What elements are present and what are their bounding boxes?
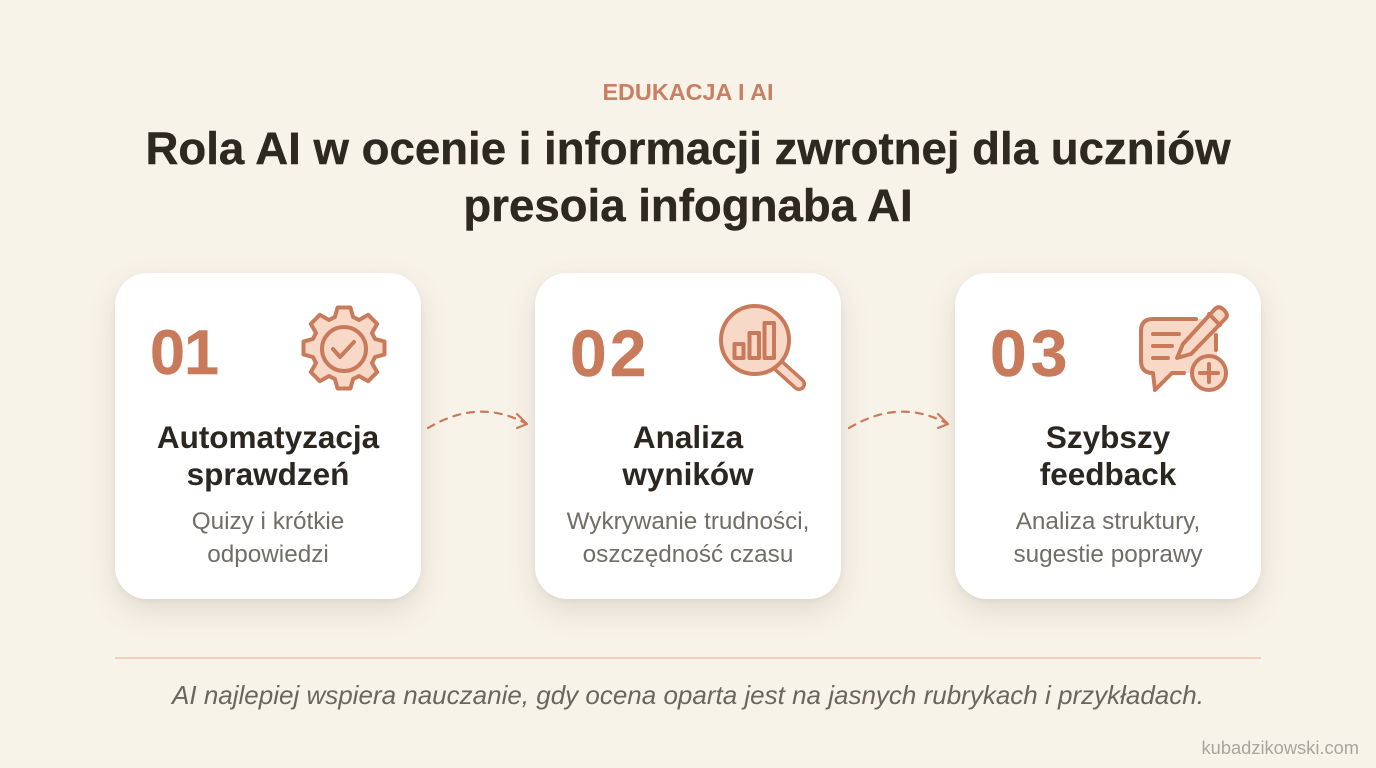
description: quizy: odpowiedzi bbox=[207, 541, 329, 568]
description: wykrywanie: Wykrywanie trudności, bbox=[567, 508, 809, 535]
heading: Analiza wyników bbox=[622, 419, 754, 492]
icon: magnifier with bars bbox=[721, 306, 799, 384]
description: analiza struktury bbox=[1013, 508, 1203, 568]
title bbox=[145, 123, 1231, 231]
icon: speech bubble with pencil and plus bbox=[1141, 307, 1227, 390]
heading: Automatyzacja sprawdzeń: sprawdzeń bbox=[187, 456, 349, 492]
eyebrow label: EDUKACJA I AI bbox=[602, 79, 774, 105]
footer note: AI najlepiej wspiera nauczanie, gdy ocena oparta jest na jasnych rubrykach i przykładach. bbox=[172, 680, 1204, 710]
heading: Szybszy feedback: Szybszy bbox=[1046, 419, 1170, 455]
panel: card 02 bbox=[535, 273, 841, 599]
heading: Analiza wyników: wyników bbox=[622, 456, 754, 492]
title: presoia infognaba AI bbox=[463, 180, 913, 231]
heading: Automatyzacja sprawdzeń bbox=[157, 419, 380, 492]
number 02: 02 bbox=[570, 316, 649, 390]
icon: gear with check bbox=[304, 308, 384, 388]
description: analiza struktury: sugestie poprawy bbox=[1013, 541, 1203, 568]
divider bbox=[115, 657, 1261, 659]
description: wykrywanie: oszczędność czasu bbox=[583, 541, 793, 568]
description: analiza struktury: Analiza struktury, bbox=[1016, 508, 1200, 535]
arrow: card 2 to card 3 bbox=[849, 412, 948, 428]
description: wykrywanie bbox=[566, 508, 809, 568]
arrow: card 1 to card 2 bbox=[428, 412, 527, 428]
heading: Szybszy feedback bbox=[1040, 419, 1176, 492]
heading: Szybszy feedback: feedback bbox=[1040, 456, 1176, 492]
watermark: kubadzikowski.com bbox=[1202, 737, 1359, 758]
title: Rola AI w ocenie i informacji zwrotnej dla uczniów bbox=[145, 123, 1231, 174]
heading: Analiza wyników: Analiza bbox=[633, 419, 743, 455]
number 03: 03 bbox=[990, 316, 1071, 390]
number 01: 01 bbox=[150, 318, 218, 388]
heading: Automatyzacja sprawdzeń: Automatyzacja bbox=[157, 419, 379, 455]
description: quizy bbox=[192, 508, 344, 568]
panel: card 01 bbox=[115, 273, 421, 599]
panel: card 03 bbox=[955, 273, 1261, 599]
description: quizy: Quizy i krótkie bbox=[192, 508, 344, 535]
